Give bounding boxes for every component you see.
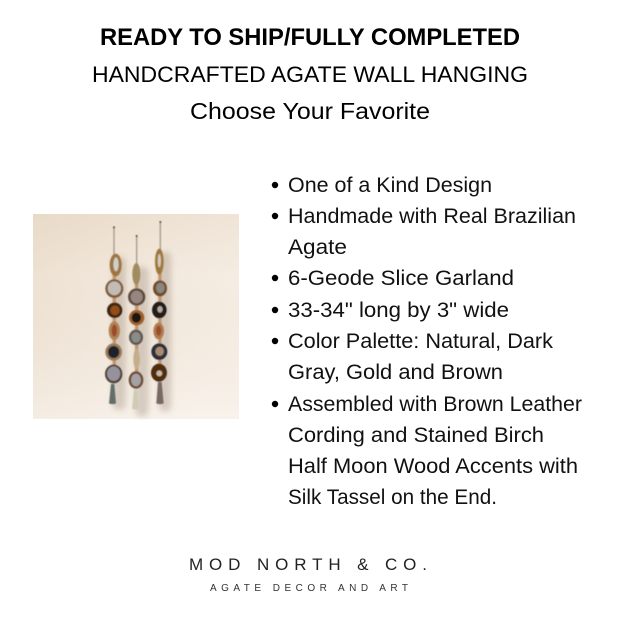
- brand tagline: AGATE DECOR AND ART: [210, 583, 408, 594]
- bullet: assembly: [272, 393, 582, 509]
- wall shadows: [113, 252, 171, 417]
- right strand: [151, 221, 167, 404]
- photo: three agate wall hangings: [33, 214, 239, 419]
- bullet: one of a kind: One of a Kind Design: [288, 174, 492, 197]
- left strand: [105, 226, 123, 404]
- bullet: color palette: Gray, Gold and Brown: [288, 361, 503, 384]
- bullet: dimensions: 33-34" long by 3" wide: [288, 299, 509, 322]
- brand logo: [189, 555, 427, 594]
- bullet: handmade: Agate: [288, 236, 347, 259]
- bullet: assembly: Cording and Stained Birch: [288, 424, 544, 447]
- heading: choose your favorite: Choose Your Favorite: [190, 98, 430, 124]
- bullet: assembly: Half Moon Wood Accents with: [288, 455, 578, 478]
- bullet: color palette: [272, 330, 554, 384]
- feature list: [272, 174, 582, 509]
- center strand: [128, 235, 145, 409]
- brand name: MOD NORTH & CO.: [189, 555, 427, 574]
- bullet: assembly: Silk Tassel on the End.: [288, 486, 497, 509]
- bullet: color palette: Color Palette: Natural, Dark: [288, 330, 554, 353]
- heading: product name: HANDCRAFTED AGATE WALL HANGING: [92, 62, 528, 87]
- bullet: handmade: [272, 205, 576, 259]
- bullet: assembly: Assembled with Brown Leather: [288, 393, 582, 416]
- title: [92, 24, 528, 124]
- heading: ready to ship: READY TO SHIP/FULLY COMPLETED: [100, 24, 520, 51]
- bullet: garland: 6-Geode Slice Garland: [288, 267, 514, 290]
- bullet: handmade: Handmade with Real Brazilian: [288, 205, 576, 228]
